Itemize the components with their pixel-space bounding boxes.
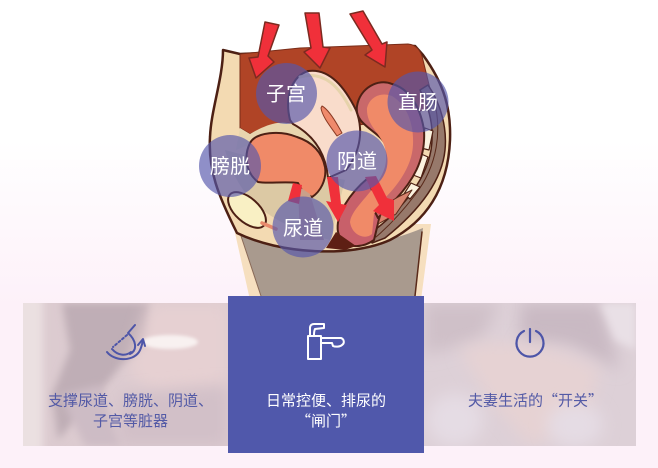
control text: 日常控便、排尿的 xyxy=(266,390,386,410)
peritoneal cavity, dark red xyxy=(240,44,434,150)
red pressure arrows xyxy=(249,11,394,222)
label: 膀胱: 膀胱 xyxy=(210,150,250,179)
icon: lifted pelvic support xyxy=(107,325,145,359)
label: 尿道: 尿道 xyxy=(283,212,323,241)
perineal tissue xyxy=(326,232,356,250)
vagina xyxy=(338,178,380,246)
bladder xyxy=(246,133,325,197)
label: 阴道 xyxy=(326,130,388,192)
pelvic cavity outline xyxy=(210,46,450,251)
pelvic floor muscle band xyxy=(372,85,445,243)
tailbone segments xyxy=(404,128,433,199)
arrow 4 xyxy=(288,183,302,204)
intimacy text: 夫妻生活的“开关” xyxy=(468,390,603,410)
control text: “闸门” xyxy=(296,410,356,431)
icon: power switch xyxy=(516,329,544,357)
faded couple photo xyxy=(424,303,636,447)
uterus xyxy=(288,71,360,178)
panel: intimacy xyxy=(424,303,636,447)
rectum xyxy=(350,82,424,237)
arrow 1 xyxy=(249,22,279,78)
arrow 3 xyxy=(350,11,387,67)
pubic bone xyxy=(222,186,272,234)
support text: 支撑尿道、膀胱、阴道、 xyxy=(48,390,213,410)
thigh and lower body xyxy=(233,224,431,300)
arrow 5 xyxy=(326,177,347,222)
label: 子宫: 子宫 xyxy=(266,78,306,106)
tan strip under cavity xyxy=(236,123,318,150)
support text: 子宫等脏器 xyxy=(93,410,168,431)
label: 膀胱 xyxy=(199,135,261,197)
label: 尿道 xyxy=(272,196,334,258)
panel: support xyxy=(23,303,228,446)
arrow 2 xyxy=(304,13,330,68)
panel: control xyxy=(228,296,424,453)
arrow 6 xyxy=(365,176,394,221)
faded smiling portrait photo xyxy=(23,303,228,446)
icon: faucet xyxy=(308,324,344,359)
label: 直肠 xyxy=(388,72,448,132)
label: 直肠: 直肠 xyxy=(398,86,438,115)
label: 子宫 xyxy=(256,63,317,124)
anatomy illustration xyxy=(210,44,450,300)
urethra tube xyxy=(298,186,324,240)
label: 阴道: 阴道 xyxy=(337,145,377,174)
